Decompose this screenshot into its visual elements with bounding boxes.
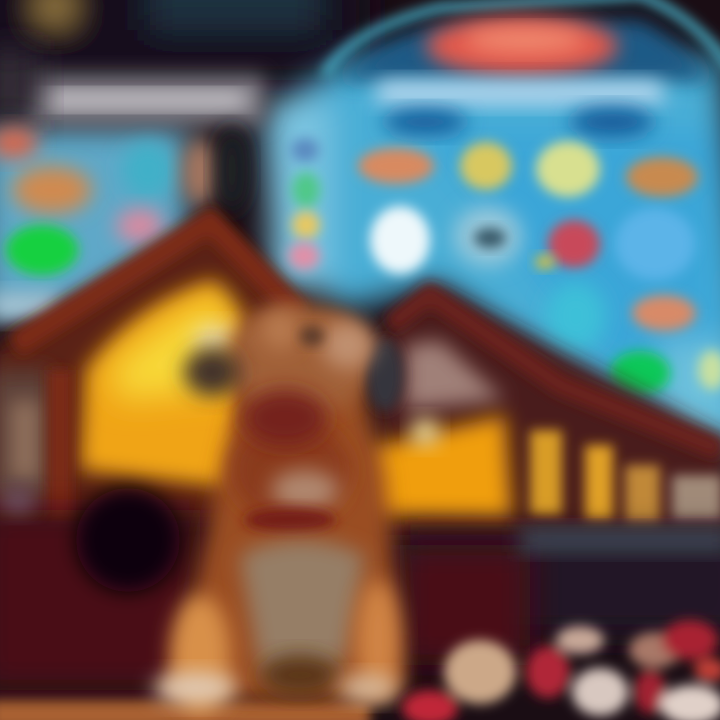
panel: building on the right: [360, 285, 720, 540]
icon: green token right: [610, 351, 670, 395]
glowing house window: [80, 280, 245, 490]
panel: large blue game board: [262, 60, 720, 470]
panel: wooden floor: [0, 700, 370, 720]
dog head: [224, 304, 376, 416]
panel: house on the left: [0, 215, 300, 520]
dog belly: [240, 540, 365, 683]
panel: dark base under the building: [400, 528, 720, 665]
panel: board header arch: [325, 0, 720, 137]
row of lit windows: [530, 430, 720, 523]
dog front paws: [170, 595, 230, 715]
house roof: [15, 222, 300, 345]
panel: dark red lower left: [0, 486, 200, 690]
panel: red and white balls foreground: [402, 620, 720, 720]
glowing building window: [360, 415, 512, 518]
black round shape: [76, 488, 180, 592]
dog collar: [244, 508, 336, 532]
icon: green token left: [6, 225, 78, 275]
panel: dog figure: [153, 304, 405, 715]
panel: left signboard: [0, 50, 265, 320]
dog chest: [230, 420, 350, 520]
panel: board icon tokens: [288, 138, 720, 395]
panel: dark night sky: [0, 0, 370, 80]
